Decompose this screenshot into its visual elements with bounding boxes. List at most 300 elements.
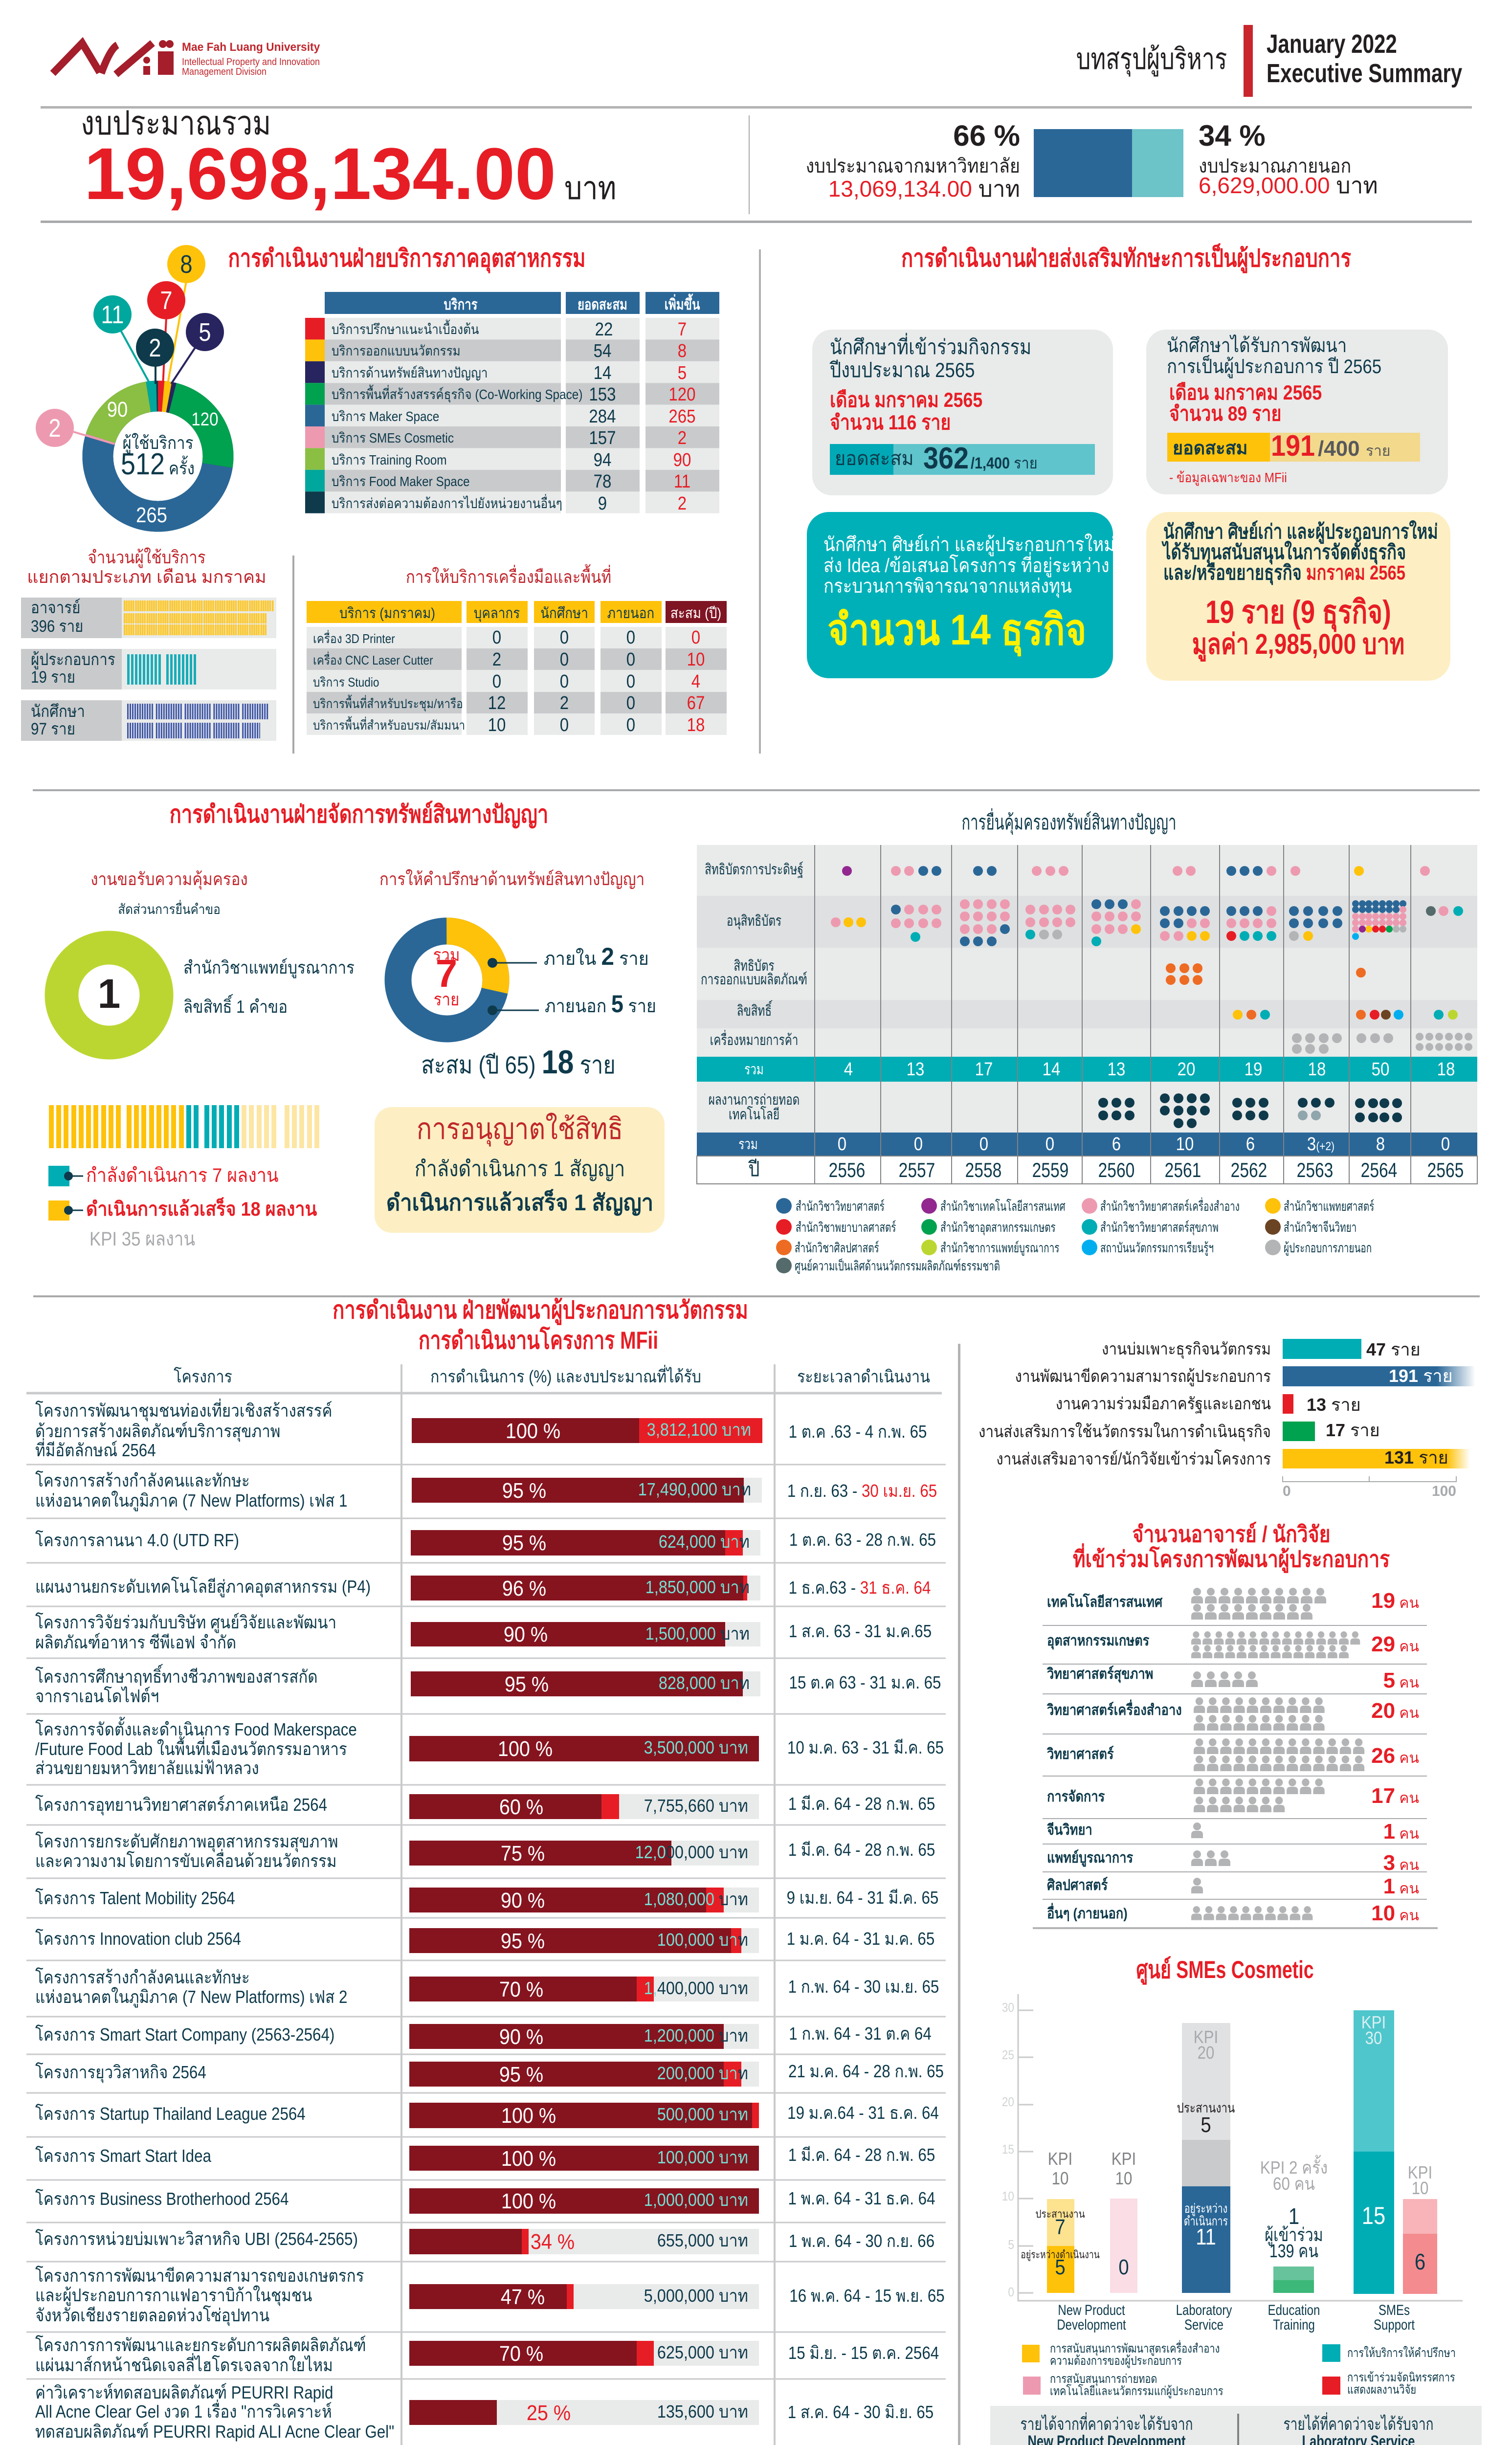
project 20: 70 % — [499, 2341, 543, 2365]
table: IP filings by year: 8 — [1376, 1134, 1385, 1155]
table: IP filings by year: 13 — [907, 1059, 924, 1080]
project rows — [35, 1399, 950, 2445]
table: service totals: 14 — [594, 362, 611, 383]
project 17: 1 พ.ค. 64 - 31 ธ.ค. 64 — [788, 2189, 935, 2209]
table: IP filings by year: 2560 — [1098, 1159, 1134, 1182]
table header: projects: การดำเนินการ (%) และงบประมาณที่ได้รับ — [430, 1365, 701, 1386]
table: service totals: บริการ — [444, 296, 478, 313]
table: tools and space usage — [307, 601, 727, 735]
chart: IP consulting donut: 7 — [436, 952, 457, 995]
table: tools and space usage: 12 — [488, 692, 506, 713]
chart: activity horizontal bars: 47 ราย — [1366, 1339, 1421, 1359]
project 6: จากราเอนโดไฟต์ฯ — [35, 1686, 159, 1707]
card: licensing: การอนุญาตใช้สิทธิ — [417, 1112, 623, 1147]
legend: works status: KPI 35 ผลงาน — [89, 1228, 195, 1250]
chart: IP consulting donut: ภายใน 2 ราย — [544, 943, 649, 970]
legend: schools: ผู้ประกอบการภายนอก — [1284, 1241, 1372, 1256]
chart: SMEs Cosmetic stacked bars: 15 — [1002, 2143, 1014, 2156]
table: tools and space usage: 0 — [560, 649, 569, 670]
project 4: 96 % — [502, 1576, 546, 1600]
project 14 — [35, 2062, 944, 2087]
chart: SMEs Cosmetic stacked bars: Training — [1273, 2316, 1315, 2333]
table: IP filings by year: 13 — [1108, 1059, 1125, 1080]
chart: SMEs Cosmetic stacked bars: Support — [1374, 2316, 1415, 2333]
chart: activity horizontal bars: งานพัฒนาขีดความสามารถผู้ประกอบการ — [1015, 1367, 1271, 1387]
project 10: โครงการ Talent Mobility 2564 — [35, 1888, 235, 1909]
table: service totals: 265 — [668, 406, 696, 427]
legend: schools: สำนักวิชาวิทยาศาสตร์สุขภาพ — [1100, 1220, 1219, 1235]
external budget — [1199, 119, 1378, 198]
project 6: 95 % — [505, 1672, 549, 1696]
chart: IP consulting donut: ราย — [434, 990, 459, 1010]
project 8: 1 มี.ค. 64 - 28 ก.พ. 65 — [788, 1794, 935, 1814]
table: service totals: 2 — [678, 493, 687, 514]
project 20: แผ่นมาส์กหน้าชนิดเจลลี่ไฮโดรเจลจากใยไหม — [35, 2353, 333, 2376]
header: red accent bar — [1244, 25, 1253, 97]
pictogram: researchers by school: เทคโนโลยีสารสนเทศ — [1047, 1593, 1163, 1610]
chart: SMEs Cosmetic stacked bars: อยู่ระหว่าง — [1184, 2201, 1227, 2216]
legend: schools: สำนักวิชาการแพทย์บูรณาการ — [940, 1241, 1059, 1256]
table: IP filings by year: 0 — [914, 1134, 923, 1155]
project 3: 95 % — [502, 1531, 546, 1555]
card: funding: นักศึกษา ศิษย์เก่า และผู้ประกอบการใหม่ — [1163, 519, 1438, 544]
legend: SMEs Cosmetic — [1022, 2339, 1456, 2399]
project 11: โครงการ Innovation club 2564 — [35, 1929, 241, 1949]
table: tools and space usage: 0 — [626, 627, 635, 648]
table: tools and space usage: 2 — [560, 692, 569, 713]
chart: protection requests donut: สัดส่วนการยื่นคำขอ — [118, 900, 221, 917]
chart: services donut with balloons: 120 — [191, 409, 219, 430]
project 9 — [35, 1831, 935, 1871]
project 2: 17,490,000 บาท — [638, 1480, 751, 1499]
legend: schools: สถาบันนวัตกรรมการเรียนรู้ฯ — [1100, 1241, 1214, 1256]
pictogram: researchers by school: 10 คน — [1371, 1901, 1419, 1925]
panel: industry services heading: การดำเนินงานฝ่ายบริการภาคอุตสาหกรรม — [228, 244, 585, 273]
card: funding: ได้รับทุนสนับสนุนในการจัดตั้งธุรกิจ — [1161, 537, 1406, 565]
project 15: 19 ม.ค.64 - 31 ธ.ค. 64 — [787, 2103, 939, 2123]
heading: users by type — [27, 547, 267, 587]
table: service totals: บริการพื้นที่สร้างสรรค์ธุรกิจ (Co-Working Space) — [332, 384, 582, 402]
table: tools and space usage: 0 — [560, 671, 569, 692]
chart: SMEs Cosmetic stacked bars: 10 — [1002, 2190, 1014, 2203]
table: IP filings by year: ผลงานการถ่ายทอด — [709, 1091, 800, 1108]
chart: SMEs Cosmetic stacked bars: SMEs — [1379, 2301, 1410, 2318]
heading: researchers: จำนวนอาจารย์ / นักวิจัย — [1132, 1521, 1331, 1547]
project 5 — [35, 1612, 932, 1653]
card: students developed: - ข้อมูลเฉพาะของ MFii — [1169, 469, 1287, 486]
table: IP filings by year: 2565 — [1427, 1159, 1464, 1182]
project 15 — [35, 2103, 939, 2128]
project 13: 1,200,000 บาท — [644, 2026, 748, 2045]
table: tools and space usage: บริการพื้นที่สำหรับอบรม/สัมมนา — [313, 716, 465, 733]
heading: SMEs Cosmetic: ศูนย์ SMEs Cosmetic — [1136, 1956, 1314, 1985]
table: service totals: 7 — [678, 319, 687, 340]
chart: SMEs Cosmetic stacked bars: 5 — [1201, 2113, 1211, 2137]
chart: IP consulting donut: ภายนอก 5 ราย — [545, 991, 656, 1018]
chart: SMEs Cosmetic stacked bars: 11 — [1196, 2224, 1216, 2250]
table: service totals: 90 — [673, 449, 691, 470]
chart: SMEs Cosmetic stacked bars: 25 — [1002, 2048, 1014, 2062]
legend: schools: สำนักวิชาแพทยศาสตร์ — [1284, 1199, 1374, 1214]
header: date and title English — [1267, 29, 1462, 88]
project 4: 1 ธ.ค.63 - 31 ธ.ค. 64 — [789, 1578, 931, 1598]
table: service totals: 157 — [589, 427, 616, 448]
project 17: โครงการ Business Brotherhood 2564 — [35, 2189, 289, 2209]
project 4 — [35, 1576, 931, 1600]
table: IP filings by year: 2558 — [965, 1159, 1001, 1182]
project 1: ที่มีอัตลักษณ์ 2564 — [35, 1438, 156, 1461]
pictogram: researchers by school: 29 คน — [1371, 1632, 1419, 1656]
project 10: 90 % — [501, 1888, 545, 1912]
project 21: 25 % — [527, 2401, 571, 2424]
project 21: 135,600 บาท — [657, 2402, 748, 2422]
table: IP filings by year: 0 — [1045, 1134, 1054, 1155]
project 1: ด้วยการสร้างผลิตภัณฑ์บริการสุขภาพ — [35, 1422, 280, 1442]
table: IP filings by year: 3(+2) — [1307, 1134, 1334, 1155]
project 18: 34 % — [531, 2229, 575, 2253]
chart: SMEs Cosmetic stacked bars: 5 — [1055, 2255, 1066, 2279]
table: IP filings by year: 20 — [1178, 1059, 1195, 1080]
chart: students pictogram — [21, 700, 276, 741]
table: IP filings by year: 2562 — [1231, 1159, 1267, 1182]
table: IP filings by year: ปี — [748, 1158, 760, 1181]
legend: SMEs Cosmetic: การเข้าร่วมจัดนิทรรศการ — [1347, 2371, 1455, 2384]
project 11: 1 ม.ค. 64 - 31 ม.ค. 65 — [787, 1929, 934, 1949]
table: IP filings by year: 2564 — [1361, 1159, 1397, 1182]
chart: services donut with balloons: 2 — [149, 334, 161, 362]
table header: projects: ระยะเวลาดำเนินงาน — [797, 1367, 930, 1386]
table: IP filings by year: 2561 — [1165, 1159, 1201, 1182]
table: IP filings by year: 50 — [1372, 1059, 1389, 1080]
heading: researchers — [1073, 1521, 1390, 1573]
pictogram: researchers by school: จีนวิทยา — [1047, 1822, 1092, 1838]
project 18: 1 พ.ค. 64 - 30 ก.ย. 66 — [789, 2231, 934, 2251]
pictogram: researchers by school: วิทยาศาสตร์ — [1047, 1746, 1114, 1762]
table: IP filings by year: เทคโนโลยี — [729, 1106, 779, 1123]
chart: SMEs Cosmetic stacked bars: 7 — [1055, 2215, 1066, 2239]
card: business ideas — [807, 512, 1115, 678]
header: logo — [53, 40, 320, 77]
project 21 — [35, 2383, 934, 2442]
project 11 — [35, 1928, 934, 1953]
header: logo: Mae Fah Luang University — [182, 40, 320, 53]
chart: SMEs Cosmetic stacked bars: KPI 2 ครั้ง — [1260, 2155, 1328, 2178]
project 19: 16 พ.ค. 64 - 15 พ.ย. 65 — [789, 2286, 945, 2306]
pictogram: researchers by school: ศิลปศาสตร์ — [1047, 1877, 1108, 1893]
project 19: 47 % — [501, 2285, 545, 2309]
chart: SMEs Cosmetic stacked bars: 10 — [1412, 2178, 1428, 2199]
panel: IP management heading: การดำเนินงานฝ่ายจัดการทรัพย์สินทางปัญญา — [170, 800, 548, 828]
card: business ideas: จำนวน 14 ธุรกิจ — [827, 606, 1087, 657]
university budget: งบประมาณจากมหาวิทยาลัย — [806, 156, 1020, 177]
table: service totals: บริการด้านทรัพย์สินทางปัญญา — [332, 365, 488, 380]
project 5: 1,500,000 บาท — [645, 1624, 750, 1644]
project 16: 100 % — [501, 2146, 556, 2170]
legend: schools — [776, 1197, 1374, 1274]
chart: activity horizontal bars: งานความร่วมมือภาครัฐและเอกชน — [1056, 1394, 1271, 1414]
table: tools and space usage: 0 — [492, 627, 501, 648]
chart: services donut with balloons: ครั้ง — [169, 456, 195, 479]
card: students joining activities — [812, 330, 1113, 495]
card: students developed: เดือน มกราคม 2565 — [1169, 381, 1322, 404]
chart: SMEs Cosmetic stacked bars: 15 — [1362, 2202, 1385, 2229]
project 19: จังหวัดเชียงรายตลอดห่วงโซ่อุปทาน — [35, 2305, 269, 2326]
legend: SMEs Cosmetic: การสนับสนุนการพัฒนาสูตรเครื่องสำอาง — [1050, 2339, 1220, 2356]
total budget: งบประมาณรวม — [81, 105, 271, 142]
chart: activity horizontal bars: 13 ราย — [1307, 1395, 1361, 1415]
pictogram: researchers by school: 17 คน — [1371, 1784, 1419, 1808]
project 12: 1,400,000 บาท — [644, 1978, 748, 1998]
project 18 — [35, 2229, 934, 2254]
project 6: โครงการศึกษาฤทธิ์ทางชีวภาพของสารสกัด — [35, 1664, 318, 1687]
chart: SMEs Cosmetic stacked bars: ผู้เข้าร่วม — [1265, 2225, 1323, 2246]
card: students joining activities: ปีงบประมาณ 2565 — [829, 359, 975, 382]
university budget — [806, 119, 1020, 201]
project 16 — [35, 2145, 935, 2171]
project 7: 100 % — [498, 1736, 553, 1760]
table: IP filings by year: อนุสิทธิบัตร — [727, 912, 781, 930]
project 1: 1 ต.ค .63 - 4 ก.พ. 65 — [789, 1422, 927, 1442]
project 1 — [35, 1399, 927, 1461]
project 12: แห่งอนาคตในภูมิภาค (7 New Platforms) เฟส 2 — [35, 1987, 347, 2008]
total budget: บาท — [564, 170, 617, 206]
project 16: โครงการ Smart Start Idea — [35, 2146, 211, 2166]
legend: schools: สำนักวิชาเทคโนโลยีสารสนเทศ — [940, 1199, 1066, 1214]
chart: protection requests donut: งานขอรับความคุ้มครอง — [90, 869, 248, 890]
card: licensing — [375, 1107, 665, 1233]
chart: services donut with balloons: 8 — [180, 250, 193, 279]
chart: SMEs Cosmetic stacked bars: 0 — [1008, 2286, 1014, 2299]
chart: SMEs Cosmetic stacked bars: 6 — [1415, 2249, 1425, 2275]
table: IP filings by year: 0 — [979, 1134, 988, 1155]
table: service totals: บริการ Food Maker Space — [332, 473, 470, 489]
project 10 — [35, 1888, 938, 1912]
chart: SMEs Cosmetic stacked bars: 20 — [1002, 2095, 1014, 2109]
table: service totals: 9 — [598, 493, 607, 514]
project 15: โครงการ Startup Thailand League 2564 — [35, 2104, 306, 2124]
project 4: 1,850,000 บาท — [645, 1578, 750, 1597]
table: service totals: บริการ Maker Space — [332, 408, 439, 424]
project 11: 100,000 บาท — [657, 1930, 748, 1950]
panel: expected revenue: รายได้จากที่คาดว่าจะได้รับจาก — [1021, 2412, 1193, 2434]
table: tools and space usage: บุคลากร — [474, 605, 520, 622]
table header: projects — [174, 1365, 930, 1386]
chart: SMEs Cosmetic stacked bars: ดำเนินการ — [1184, 2214, 1228, 2228]
card: licensing: ดำเนินการแล้วเสร็จ 1 สัญญา — [386, 1189, 653, 1216]
card: students developed: นักศึกษาได้รับการพัฒนา — [1167, 334, 1347, 356]
chart: services donut with balloons: 7 — [160, 287, 173, 315]
legend: schools: สำนักวิชาพยาบาลศาสตร์ — [796, 1220, 896, 1235]
card: funding: และ/หรือขยายธุรกิจ มกราคม 2565 — [1163, 561, 1405, 585]
legend: SMEs Cosmetic: การสนับสนุนการถ่ายทอด — [1050, 2372, 1157, 2386]
project 3 — [35, 1530, 936, 1556]
chart: activity horizontal bars: งานส่งเสริมการใช้นวัตกรรมในการดำเนินธุรกิจ — [978, 1422, 1271, 1442]
heading: users by type: แยกตามประเภท เดือน มกราคม — [27, 567, 267, 587]
budget split bar — [1034, 129, 1183, 197]
heading: innovation entrepreneur dev: การดำเนินงาน ฝ่ายพัฒนาผู้ประกอบการนวัตกรรม — [333, 1296, 748, 1325]
legend: SMEs Cosmetic: แสดงผลงานวิจัย — [1347, 2383, 1416, 2397]
chart: IP consulting donut: รวม — [433, 945, 460, 965]
card: funding — [1146, 512, 1450, 681]
chart: services donut with balloons — [36, 245, 224, 527]
chart: SMEs Cosmetic stacked bars: 30 — [1365, 2028, 1382, 2048]
table: IP filings by year — [697, 845, 1477, 1184]
chart: services donut with balloons: ผู้ใช้บริการ — [123, 433, 193, 454]
project 9: โครงการยกระดับศักยภาพอุตสาหกรรมสุขภาพ — [35, 1831, 338, 1852]
total budget: 19,698,134.00 — [84, 133, 556, 215]
project 1: 3,812,100 บาท — [647, 1420, 751, 1440]
legend: SMEs Cosmetic: ความต้องการของผู้ประกอบการ — [1050, 2354, 1182, 2368]
legend: works status: กำลังดำเนินการ 7 ผลงาน — [86, 1165, 279, 1186]
project 16: 100,000 บาท — [657, 2148, 748, 2167]
table: IP filings by year: 6 — [1246, 1134, 1255, 1155]
legend: schools: สำนักวิชาอุตสาหกรรมเกษตร — [940, 1220, 1056, 1235]
project 17: 100 % — [501, 2189, 556, 2213]
table: IP filings by year: 18 — [1308, 1059, 1326, 1080]
project 14: โครงการยุววิสาหกิจ 2564 — [35, 2062, 206, 2083]
table: service totals: 153 — [589, 384, 616, 405]
project 21: ทดสอบผลิตภัณฑ์ PEURRI Rapid ALI Acne Clear Gel" — [35, 2422, 394, 2442]
table: service totals: บริการปรึกษาแนะนำเบื้องต้น — [332, 319, 479, 337]
project 8: 7,755,660 บาท — [644, 1796, 748, 1816]
chart: SMEs Cosmetic stacked bars: 60 คน — [1273, 2174, 1315, 2194]
project 2: แห่งอนาคตในภูมิภาค (7 New Platforms) เฟส 1 — [35, 1490, 347, 1511]
table: IP filings by year: การออกแบบผลิตภัณฑ์ — [701, 971, 807, 988]
project 6 — [35, 1664, 941, 1707]
project 7: 10 ม.ค. 63 - 31 มี.ค. 65 — [787, 1738, 944, 1758]
chart: SMEs Cosmetic stacked bars: KPI — [1194, 2027, 1218, 2047]
table: service totals: 94 — [594, 449, 611, 470]
table: tools and space usage: สะสม (ปี) — [670, 605, 721, 621]
legend: works status: ดำเนินการแล้วเสร็จ 18 ผลงาน — [86, 1197, 317, 1220]
table: IP filings by year: เครื่องหมายการค้า — [710, 1030, 798, 1048]
table: service totals: 8 — [678, 340, 687, 361]
table: tools and space usage: 10 — [687, 649, 705, 670]
table: service totals: บริการ SMEs Cosmetic — [332, 430, 454, 445]
chart: activity horizontal bars: 191 ราย — [1389, 1366, 1453, 1386]
chart: activity horizontal bars: งานส่งเสริมอาจารย์/นักวิจัยเข้าร่วมโครงการ — [996, 1449, 1271, 1468]
chart: SMEs Cosmetic stacked bars: Education — [1268, 2301, 1320, 2318]
card: funding: 19 ราย (9 ธุรกิจ) — [1205, 594, 1391, 632]
project 6: 828,000 บาท — [659, 1673, 750, 1693]
project 1: 100 % — [506, 1419, 560, 1443]
chart: activity horizontal bars: 0 — [1283, 1483, 1291, 1499]
heading: tools and space: การให้บริการเครื่องมือและพื้นที่ — [406, 564, 611, 587]
heading: IP filings: การยื่นคุ้มครองทรัพย์สินทางปัญญา — [961, 808, 1177, 835]
project 10: 9 เม.ย. 64 - 31 มี.ค. 65 — [787, 1888, 938, 1908]
project 9: 75 % — [501, 1841, 545, 1865]
project 21: 1 ส.ค. 64 - 30 มิ.ย. 65 — [788, 2402, 934, 2423]
table: IP filings by year: 0 — [1441, 1134, 1450, 1155]
panel: entrepreneurship heading: การดำเนินงานฝ่ายส่งเสริมทักษะการเป็นผู้ประกอบการ — [901, 244, 1351, 273]
project 20 — [35, 2335, 939, 2376]
project 20: 625,000 บาท — [657, 2343, 748, 2362]
chart: SMEs Cosmetic stacked bars: 0 — [1118, 2255, 1129, 2279]
project 12: โครงการสร้างกำลังคนและทักษะ — [35, 1967, 250, 1988]
pictogram: researchers by school: 3 คน — [1383, 1851, 1419, 1875]
table: tools and space usage: 0 — [626, 714, 635, 735]
chart: SMEs Cosmetic stacked bars — [1002, 1994, 1463, 2333]
table: tools and space usage: บริการพื้นที่สำหรับประชุม/หารือ — [313, 694, 463, 711]
table: tools and space usage: 0 — [691, 627, 700, 648]
chart: SMEs Cosmetic stacked bars: KPI — [1361, 2013, 1386, 2033]
chart: entrepreneurs pictogram: 19 ราย — [31, 667, 75, 686]
chart: SMEs Cosmetic stacked bars: 1 — [1289, 2204, 1299, 2229]
table: tools and space usage: บริการ Studio — [313, 676, 379, 689]
chart: activity horizontal bars: 17 ราย — [1326, 1420, 1380, 1440]
project 9: 1 มี.ค. 64 - 28 ก.พ. 65 — [788, 1840, 935, 1860]
project 2: โครงการสร้างกำลังคนและทักษะ — [35, 1470, 250, 1491]
chart: entrepreneurs pictogram: ผู้ประกอบการ — [31, 650, 115, 670]
project 19: และผู้ประกอบการกาแฟอาราบิก้าในชุมชน — [35, 2285, 312, 2306]
table: tools and space usage: 0 — [560, 627, 569, 648]
table: IP filings by year: 2563 — [1297, 1159, 1333, 1182]
chart: SMEs Cosmetic stacked bars: KPI — [1048, 2149, 1072, 2169]
project 12 — [35, 1967, 939, 2008]
project 9: 12,000,000 บาท — [635, 1843, 748, 1862]
table: tools and space usage: บริการ (มกราคม) — [339, 605, 435, 621]
project 15: 500,000 บาท — [657, 2105, 748, 2124]
project 5: 90 % — [504, 1622, 548, 1646]
chart: works stripe — [51, 1105, 317, 1148]
table: tools and space usage: 10 — [488, 714, 506, 735]
project 12: 1 ก.พ. 64 - 30 เม.ย. 65 — [788, 1977, 939, 1997]
chart: activity horizontal bars: 131 ราย — [1384, 1447, 1448, 1467]
chart: activity horizontal bars — [978, 1339, 1475, 1499]
project 8: โครงการอุทยานวิทยาศาสตร์ภาคเหนือ 2564 — [35, 1795, 327, 1816]
project 5: ผลิตภัณฑ์อาหาร ซีพีเอฟ จำกัด — [35, 1633, 236, 1653]
table: IP filings by year: 2557 — [899, 1159, 935, 1182]
project 10: 1,080,000 บาท — [644, 1889, 748, 1909]
heading: innovation entrepreneur dev: การดำเนินงานโครงการ MFii — [419, 1326, 658, 1354]
project 7: ส่วนขยายมหาวิทยาลัยแม่ฟ้าหลวง — [35, 1758, 259, 1778]
table: tools and space usage: 18 — [687, 714, 705, 735]
chart: SMEs Cosmetic stacked bars: KPI — [1112, 2149, 1136, 2169]
chart: SMEs Cosmetic stacked bars: Development — [1057, 2316, 1126, 2333]
project 6: 15 ต.ค 63 - 31 ม.ค. 65 — [789, 1673, 941, 1693]
pictogram: researchers by school: แพทย์บูรณาการ — [1047, 1849, 1133, 1867]
card: students joining activities: 362 — [923, 442, 969, 475]
header: title Thai: บทสรุปผู้บริหาร — [1076, 43, 1227, 77]
pictogram: researchers by school: 1 คน — [1383, 1874, 1419, 1898]
project 3: 624,000 บาท — [659, 1532, 750, 1552]
project 18: โครงการหน่วยบ่มเพาะวิสาหกิจ UBI (2564-2565) — [35, 2229, 358, 2249]
header: date and title English: January 2022 — [1267, 29, 1397, 59]
card: students joining activities: /1,400 ราย — [971, 455, 1038, 472]
heading: users by type: จำนวนผู้ใช้บริการ — [88, 547, 206, 568]
pictogram: researchers by school: วิทยาศาสตร์สุขภาพ — [1047, 1666, 1153, 1683]
pictogram: researchers by school: วิทยาศาสตร์เครื่องสำอาง — [1047, 1699, 1182, 1718]
card: students developed: จำนวน 89 ราย — [1169, 402, 1281, 425]
table: tools and space usage: ภายนอก — [607, 605, 654, 621]
chart: SMEs Cosmetic stacked bars: KPI — [1408, 2163, 1432, 2183]
chart: SMEs Cosmetic stacked bars: 10 — [1115, 2169, 1132, 2189]
chart: SMEs Cosmetic stacked bars: 5 — [1008, 2238, 1014, 2252]
legend: SMEs Cosmetic: เทคโนโลยีและนวัตกรรมแก่ผู้ประกอบการ — [1050, 2384, 1223, 2399]
project 5: โครงการวิจัยร่วมกับบริษัท ศูนย์วิจัยและพัฒนา — [35, 1612, 336, 1633]
project 3: 1 ต.ค. 63 - 28 ก.พ. 65 — [789, 1530, 936, 1550]
legend: schools: สำนักวิชาจีนวิทยา — [1284, 1220, 1356, 1235]
panel: expected revenue: รายได้ที่คาดว่าจะได้รับจาก — [1284, 2412, 1433, 2434]
project 19: 5,000,000 บาท — [644, 2286, 748, 2306]
pictogram: researchers by school: อื่นๆ (ภายนอก) — [1047, 1903, 1128, 1921]
chart: entrepreneurs pictogram — [21, 649, 276, 689]
chart: activity horizontal bars: 100 — [1432, 1483, 1456, 1499]
project 15: 100 % — [501, 2103, 556, 2127]
project 13: 1 ก.พ. 64 - 31 ต.ค 64 — [789, 2024, 932, 2044]
heading: innovation entrepreneur dev — [333, 1296, 748, 1354]
table: tools and space usage: 0 — [626, 649, 635, 670]
